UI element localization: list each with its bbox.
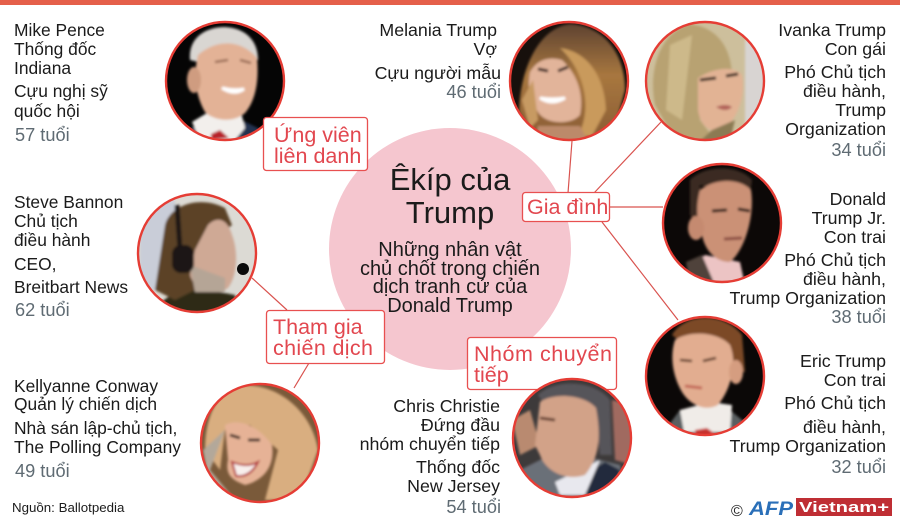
text: Ivanka Trump bbox=[778, 20, 886, 160]
text: Donald Trump Jr.: Donald bbox=[830, 189, 886, 209]
text: Kellyanne Conway: Quản lý chiến dịch bbox=[14, 394, 157, 414]
photo: Steve Bannon bbox=[136, 192, 258, 314]
text: Ivanka Trump: Organization bbox=[785, 119, 886, 139]
label: Nhóm chuyển tiếp: Nhóm chuyển bbox=[474, 342, 612, 366]
photo: Mike Pence bbox=[160, 20, 290, 145]
logo: AFP Vietnam+: Vietnam+ bbox=[799, 499, 889, 516]
label: Tham gia chiến dịch bbox=[266, 310, 384, 364]
text: Melania Trump bbox=[375, 20, 501, 102]
text: Ivanka Trump: 34 tuổi bbox=[831, 140, 886, 160]
text: Kellyanne Conway: Nhà sán lập-chủ tịch, bbox=[14, 418, 177, 438]
text: Ivanka Trump: Trump bbox=[835, 100, 886, 120]
text: Ivanka Trump: Con gái bbox=[825, 39, 886, 59]
text: Steve Bannon: Chủ tịch bbox=[14, 211, 78, 231]
text: Donald Trump Jr. bbox=[730, 189, 886, 327]
text: Melania Trump: Vợ bbox=[473, 39, 497, 59]
central subtitle: chủ chốt trong chiến bbox=[360, 258, 540, 280]
text: Kellyanne Conway: 49 tuổi bbox=[15, 461, 70, 481]
label: Ứng viên liên danh: liên danh bbox=[274, 144, 361, 168]
photo: Eric Trump bbox=[644, 316, 766, 436]
text: Melania Trump: Melania Trump bbox=[379, 20, 497, 40]
text: Steve Bannon: Breitbart News bbox=[14, 277, 128, 297]
label: Nhóm chuyển tiếp: tiếp bbox=[474, 363, 509, 387]
connector lines bbox=[252, 122, 678, 388]
label: Tham gia chiến dịch: Tham gia bbox=[273, 315, 363, 339]
central title: Trump bbox=[406, 195, 494, 230]
text: Mike Pence: quốc hội bbox=[14, 101, 80, 121]
label: Nhóm chuyển tiếp bbox=[468, 338, 616, 390]
source: Nguồn: Ballotpedia bbox=[12, 500, 125, 515]
logo: AFP Vietnam+: AFP bbox=[748, 499, 793, 520]
label: Ứng viên liên danh: Ứng viên bbox=[274, 122, 362, 147]
photo: Ivanka Trump bbox=[640, 20, 770, 145]
text: Steve Bannon bbox=[14, 192, 128, 320]
text: Mike Pence bbox=[14, 20, 108, 145]
text: Ivanka Trump: Ivanka Trump bbox=[778, 20, 886, 40]
text: Steve Bannon: điều hành bbox=[14, 230, 90, 250]
central circle bbox=[329, 128, 571, 370]
text: Mike Pence: 57 tuổi bbox=[15, 125, 70, 145]
central title: Êkíp của bbox=[390, 162, 511, 197]
logo: AFP Vietnam+: © bbox=[731, 503, 743, 520]
text: Eric Trump: Trump Organization bbox=[730, 436, 886, 456]
text: Donald Trump Jr.: Con trai bbox=[824, 227, 886, 247]
text: Eric Trump: 32 tuổi bbox=[831, 457, 886, 477]
text: Steve Bannon: 62 tuổi bbox=[15, 300, 70, 320]
text: Donald Trump Jr.: Phó Chủ tịch bbox=[784, 250, 886, 270]
text: Donald Trump Jr.: điều hành, bbox=[803, 269, 886, 289]
text: Kellyanne Conway: The Polling Company bbox=[14, 437, 181, 457]
text: Mike Pence: Indiana bbox=[14, 58, 71, 78]
text: Chris Christie: 54 tuổi bbox=[446, 497, 501, 517]
text: Melania Trump: 46 tuổi bbox=[446, 82, 501, 102]
text: Eric Trump: Phó Chủ tịch bbox=[784, 393, 886, 413]
text: Donald Trump Jr.: Trump Organization bbox=[730, 288, 886, 308]
text: Eric Trump: Eric Trump bbox=[800, 351, 886, 371]
text: Donald Trump Jr.: 38 tuổi bbox=[831, 307, 886, 327]
logo: AFP Vietnam+ bbox=[731, 498, 892, 520]
text: Mike Pence: Cựu nghị sỹ bbox=[14, 81, 108, 101]
text: Chris Christie: Chris Christie bbox=[393, 396, 500, 416]
text: Chris Christie: nhóm chuyển tiếp bbox=[360, 434, 500, 454]
text: Chris Christie: Thống đốc bbox=[416, 457, 500, 477]
central subtitle: dịch tranh cử của bbox=[373, 276, 528, 298]
text: Donald Trump Jr.: Trump Jr. bbox=[812, 208, 886, 228]
text: Eric Trump: Con trai bbox=[824, 370, 886, 390]
label: Ứng viên liên danh bbox=[264, 118, 368, 170]
photo: Donald Trump Jr. bbox=[660, 160, 785, 285]
central subtitle: Donald Trump bbox=[387, 295, 513, 317]
text: Chris Christie: New Jersey bbox=[407, 476, 500, 496]
photo: Melania Trump bbox=[505, 20, 635, 145]
text: Eric Trump: điều hành, bbox=[803, 417, 886, 437]
text: Kellyanne Conway: Kellyanne Conway bbox=[14, 376, 158, 396]
central subtitle bbox=[360, 239, 540, 317]
photo: Chris Christie bbox=[510, 375, 635, 500]
text: Chris Christie: Đứng đầu bbox=[421, 415, 500, 435]
text: Mike Pence: Mike Pence bbox=[14, 20, 105, 40]
photo: Kellyanne Conway bbox=[200, 382, 320, 504]
text: Mike Pence: Thống đốc bbox=[14, 39, 96, 59]
text: Steve Bannon: CEO, bbox=[14, 254, 57, 274]
text: Steve Bannon: Steve Bannon bbox=[14, 192, 123, 212]
text: Chris Christie bbox=[360, 396, 501, 517]
label: Gia đình: Gia đình bbox=[527, 195, 608, 219]
text: Ivanka Trump: Phó Chủ tịch bbox=[784, 62, 886, 82]
text: Kellyanne Conway bbox=[14, 376, 181, 481]
central subtitle: Những nhân vật bbox=[378, 239, 522, 261]
text: Ivanka Trump: điều hành, bbox=[803, 81, 886, 101]
text: Eric Trump bbox=[730, 351, 886, 477]
text: Melania Trump: Cựu người mẫu bbox=[375, 62, 501, 83]
label: Tham gia chiến dịch: chiến dịch bbox=[273, 336, 373, 360]
central title bbox=[390, 162, 511, 230]
top bar bbox=[0, 0, 900, 5]
